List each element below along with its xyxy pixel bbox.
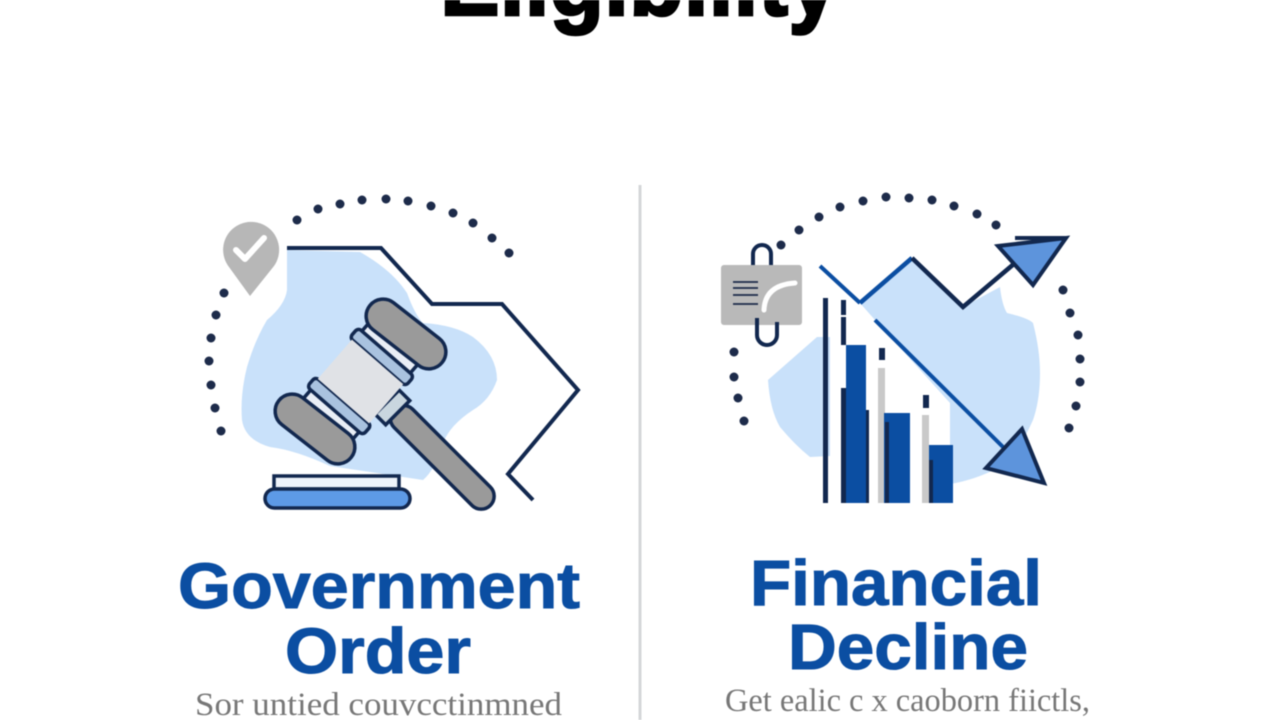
gavel base [265, 476, 410, 508]
icon: clipped document [721, 245, 802, 345]
heading: financial decline: Decline [788, 611, 1028, 683]
body text: right: Get ealic c x caoborn fiictls, [725, 683, 1090, 719]
heading: financial decline [750, 547, 1042, 683]
heading: government order [178, 550, 580, 687]
arrow: growth zigzag [860, 236, 1066, 307]
gavel handle [375, 390, 502, 517]
heading: government order: Order [285, 615, 471, 687]
arrow: decline [820, 266, 1044, 483]
dotted arc [730, 192, 1084, 432]
hexagon outline [287, 248, 578, 500]
pale blue blob [242, 250, 497, 480]
panel: government order [178, 194, 580, 720]
dotted arc [204, 194, 514, 436]
icon: chart illustration [721, 192, 1084, 503]
gavel head [268, 292, 453, 471]
heading: government order: Government [178, 550, 580, 622]
panel: financial decline [721, 192, 1090, 719]
location pin with check [223, 222, 279, 296]
pale blue blob left [768, 337, 830, 457]
heading: financial decline: Financial [750, 547, 1042, 619]
pale blue blob [860, 258, 1040, 484]
bar chart [823, 298, 953, 503]
icon: gavel illustration [204, 194, 578, 517]
